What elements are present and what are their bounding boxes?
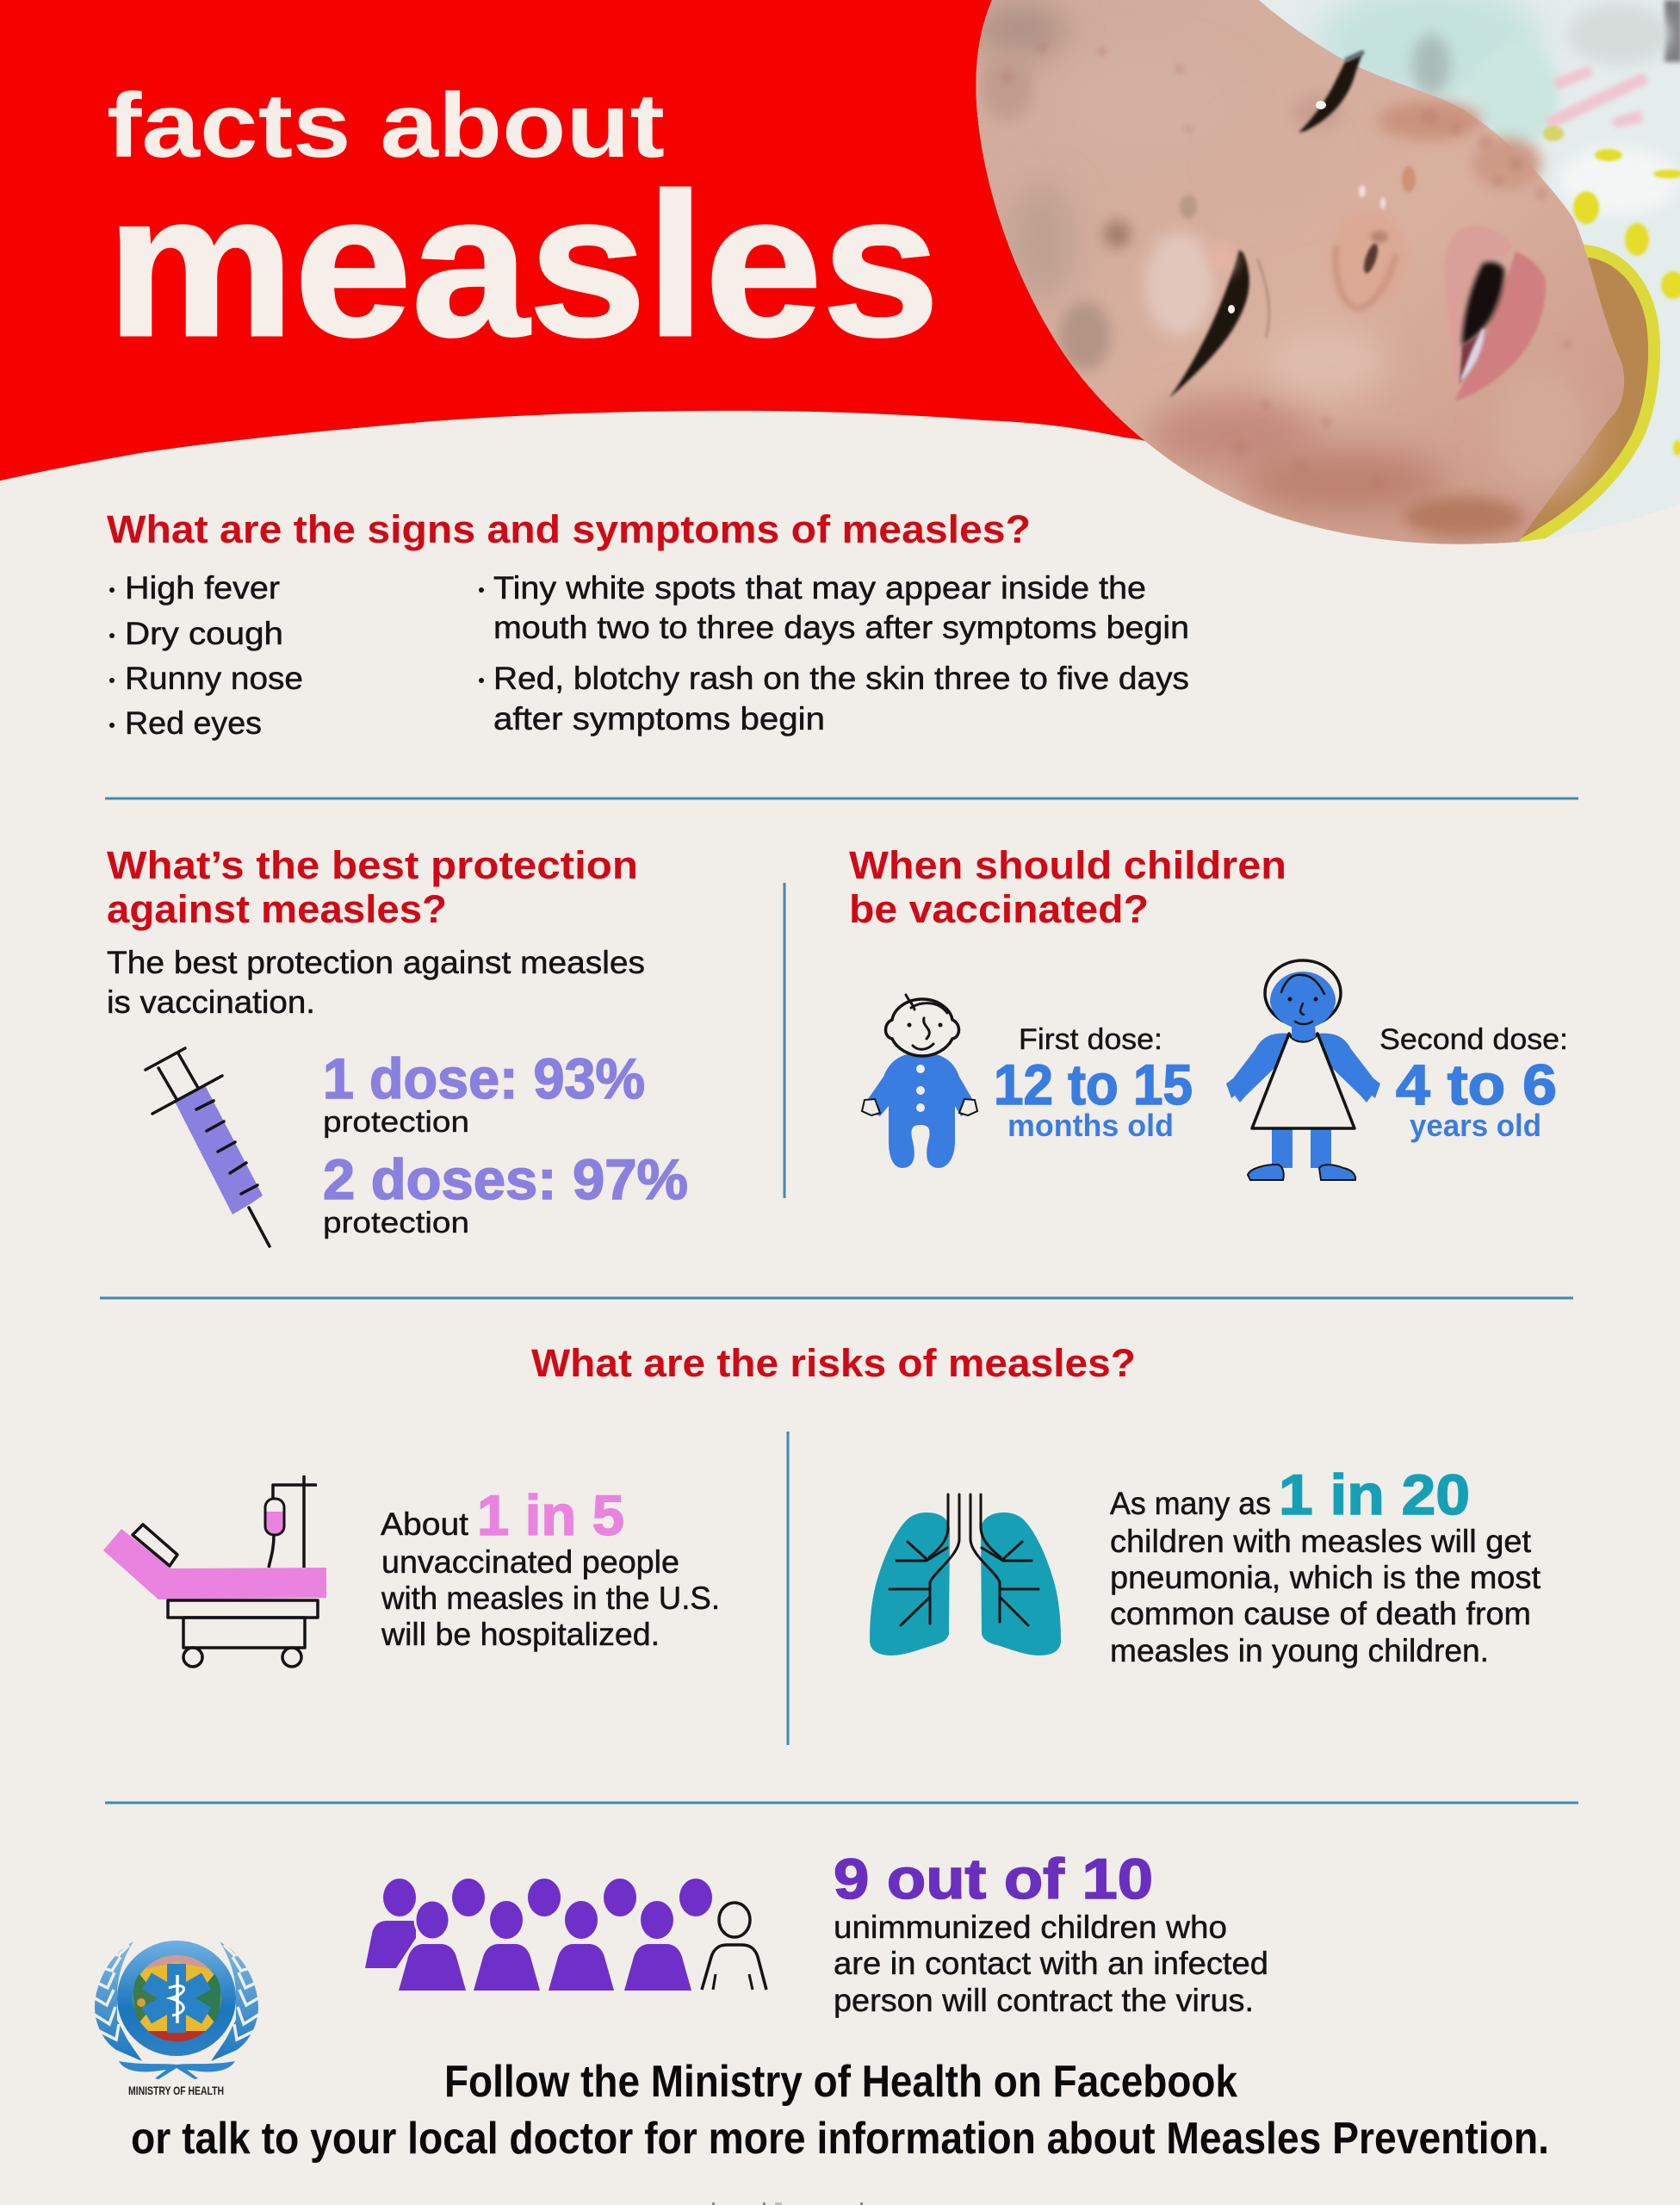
footer message: or talk to your local doctor for more information about Measles Prevention. [131,2114,1549,2164]
footer message: Follow the Ministry of Health on Facebook [444,2057,1237,2107]
text: pneumonia: measles in young children. [1110,1633,1489,1668]
text: hospitalization [381,1483,720,1652]
list: later symptoms: mouth two to three days after symptoms begin [493,610,1189,645]
text: first dose [994,1023,1193,1143]
stat: 1 dose: protection [323,1106,469,1139]
text: second dose [1379,1023,1568,1143]
text: 9 out of 10: unimmunized children who [834,1910,1227,1945]
nose [1342,219,1398,289]
stat: 2 doses [323,1147,688,1239]
heading: best protection: What’s the best protection [107,843,638,887]
heading: when to vaccinate: When should children [849,843,1286,887]
text: first dose: First dose: [1019,1023,1162,1056]
text: pneumonia: children with measles will get [1110,1524,1532,1559]
left laurel [92,1941,142,2061]
list: short symptoms: Dry cough [125,616,283,651]
title: facts about [107,75,665,177]
icon: hospital bed [103,1475,326,1667]
yellow collar [1464,251,1654,551]
text: hospitalization: 1 in 5 [477,1483,624,1547]
skin tones [973,4,1068,56]
logo: Ministry of Health: MINISTRY OF HEALTH [128,2084,224,2097]
heading: when to vaccinate: be vaccinated? [849,887,1149,931]
lower eye [1169,250,1249,398]
text: 9 out of 10: person will contract the virus. [834,1983,1254,2018]
red header shape [0,0,1206,481]
text: pneumonia: As many as [1110,1486,1271,1521]
list: short symptoms [109,570,303,741]
heading: signs and symptoms: What are the signs and symptoms of measles? [107,507,1031,551]
footer message [131,2057,1549,2164]
list: later symptoms: after symptoms begin [493,701,825,736]
stat: 1 dose [323,1047,645,1139]
icon: child [1226,960,1380,1180]
text: first dose: months old [1007,1108,1174,1143]
list: later symptoms: Tiny white spots that may appear inside the [493,570,1146,606]
text: hospitalization: About [381,1506,469,1542]
mouth [1445,227,1512,338]
text: best protection: is vaccination. [107,984,315,1020]
text: hospitalization: unvaccinated people [381,1544,679,1580]
heading: risks: What are the risks of measles? [531,1341,1136,1385]
list: short symptoms: Runny nose [125,661,303,696]
text: hospitalization: will be hospitalized. [381,1617,660,1652]
text: pneumonia: common cause of death from [1110,1596,1531,1631]
text: best protection [107,945,645,1020]
text: 9 out of 10: are in contact with an infected [834,1946,1268,1981]
face [947,0,1624,560]
text: best protection: The best protection against measles [107,945,645,980]
icon: lungs [870,1494,1061,1655]
icon: baby [862,995,977,1168]
icon: syringe [146,1048,270,1246]
heading: when to vaccinate [849,843,1286,931]
flag disc [133,1955,220,2041]
right laurel [211,1941,261,2061]
list: short symptoms: Red eyes [125,705,262,741]
text: second dose: Second dose: [1379,1023,1568,1056]
upper eye [1299,53,1362,133]
text: pneumonia: pneumonia, which is the most [1110,1560,1541,1595]
logo: Ministry of Health [92,1941,261,2097]
stat: 2 doses: 2 doses: 97% [323,1147,688,1211]
text: second dose: years old [1410,1108,1541,1143]
list: later symptoms [479,570,1189,736]
heading: best protection [107,843,638,931]
title: measles [107,152,939,379]
text: pneumonia [1110,1463,1541,1668]
rash blotches [1002,43,1571,427]
text: second dose: 4 to 6 [1396,1053,1557,1116]
list: later symptoms: Red, blotchy rash on the skin three to five days [493,661,1189,696]
text: 9 out of 10: 9 out of 10 [834,1847,1153,1910]
list: short symptoms: High fever [125,570,280,606]
text: first dose: 12 to 15 [994,1053,1193,1116]
text: pneumonia: 1 in 20 [1279,1463,1470,1526]
stat: 1 dose: 1 dose: 93% [323,1047,645,1110]
stat: 2 doses: protection [323,1207,469,1239]
text: hospitalization: with measles in the U.S. [381,1581,720,1616]
text: 9 out of 10 [834,1847,1268,2018]
ribbon [119,2061,235,2079]
icon: group of people [365,1879,766,1991]
heading: best protection: against measles? [107,887,447,931]
photo: child with measles rash [947,0,1680,560]
